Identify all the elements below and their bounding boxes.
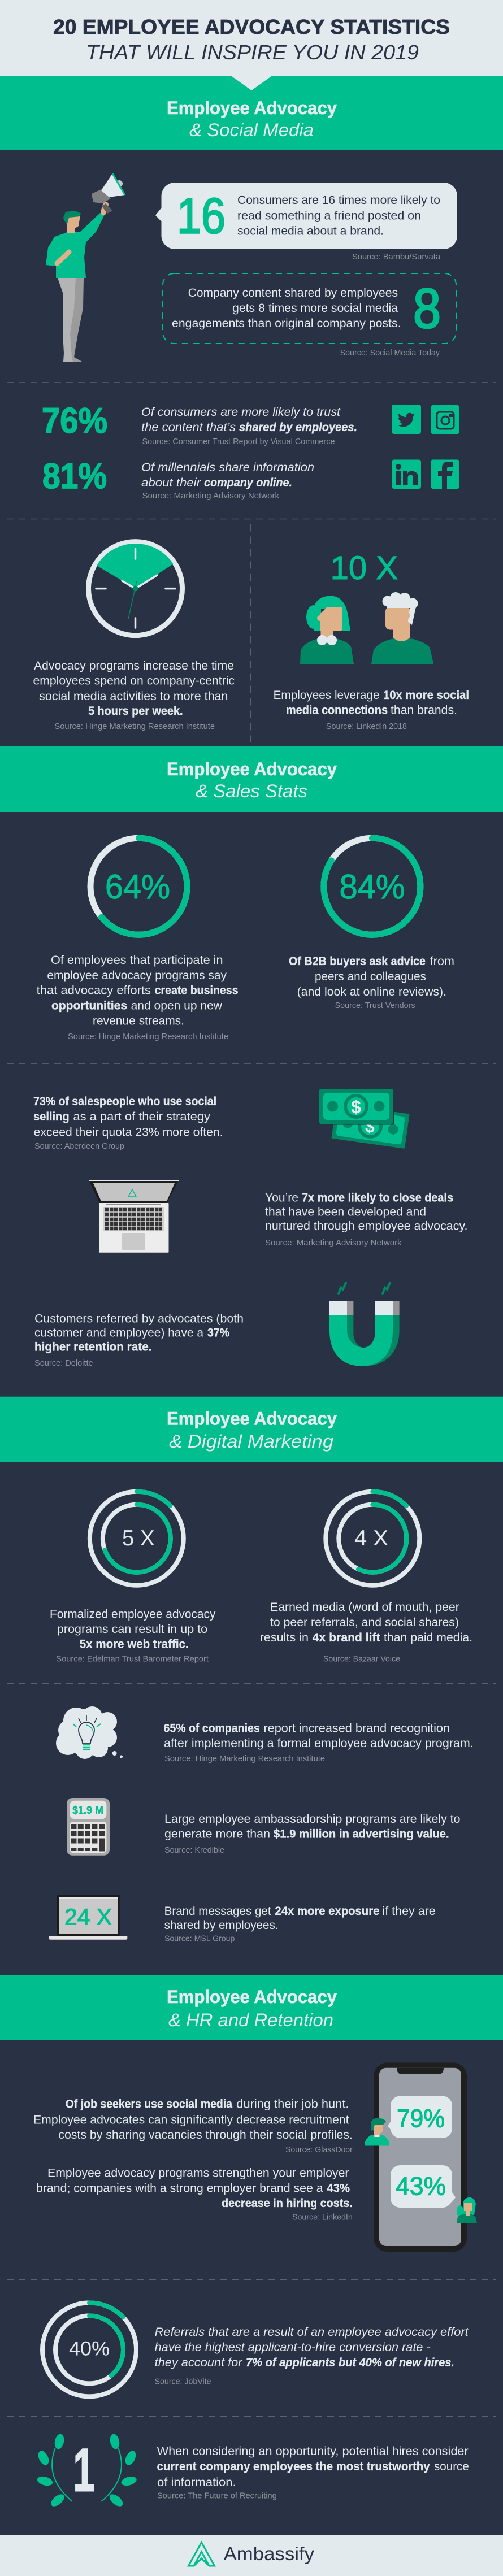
text: advocacy programs time: Advocacy programs increase the time — [34, 659, 234, 672]
icon: laptop 24 X — [49, 1895, 127, 1940]
text: B2B buyers: Source: Trust Vendors — [335, 1001, 415, 1010]
header: title panel — [0, 0, 503, 76]
text: customer retention: Source: Deloitte — [34, 1359, 93, 1368]
icon: calculator: $1.9 M — [72, 1805, 103, 1817]
text: customer retention: customer and employee) have a — [34, 1327, 203, 1340]
text: 10x connections: media connections — [286, 704, 388, 717]
illustration: person with megaphone — [46, 173, 125, 362]
stat: 81 percent: company online. — [204, 476, 292, 489]
callout: 16 times: Consumers are 16 times more likely to — [237, 194, 440, 207]
chat bubble: 43 percent — [391, 2165, 456, 2208]
text: B2B buyers: peers and colleagues — [315, 970, 426, 983]
stat: 81 percent: 81% — [42, 457, 107, 496]
text: 10x connections: Source: LinkedIn 2018 — [326, 722, 407, 731]
stat: 10 X: 10 X — [331, 550, 398, 587]
text: web traffic: 5x more web traffic. — [80, 1638, 189, 1651]
text: social selling: selling — [33, 1110, 70, 1123]
text: earned media: than paid media. — [384, 1631, 472, 1644]
double ring chart: 5 X: 5 X — [122, 1526, 155, 1550]
text: business opportunities — [37, 954, 239, 1041]
text: earned media: results in — [260, 1631, 309, 1644]
text: earned media: to peer referrals, and social shares) — [270, 1616, 459, 1629]
section banner: HR and retention: Employee Advocacy — [167, 1987, 337, 2007]
icon: magnet — [329, 1283, 400, 1366]
text: 24x exposure: 24x more exposure — [275, 1905, 379, 1918]
text: customer retention: higher retention rate. — [34, 1341, 151, 1354]
text: trustworthy source: source — [434, 2460, 469, 2473]
section banner: HR and retention: & HR and Retention — [168, 2010, 333, 2030]
callout: 16 times: social media about a brand. — [237, 225, 384, 237]
footer: Ambassify logo: Ambassify — [224, 2543, 315, 2564]
icon: Ambassify mark — [189, 2543, 215, 2566]
section banner: sales stats: & Sales Stats — [196, 781, 307, 801]
chat bubble: 43 percent: 43% — [396, 2171, 446, 2200]
icon: instagram — [431, 405, 459, 434]
icon: laptop 24 X: 24 X — [64, 1904, 112, 1930]
text: 24x exposure — [164, 1905, 436, 1944]
text: social selling: 73% of salespeople who use social — [33, 1095, 216, 1108]
double ring chart: 40 percent: 40% — [69, 2338, 110, 2360]
text: 7x close deals — [265, 1192, 468, 1248]
text: job seekers: costs by sharing vacancies through their social profiles. — [58, 2128, 353, 2141]
text: earned media: 4x brand lift — [313, 1631, 380, 1644]
stat: 76 percent: Of consumers are more likely to trust — [141, 406, 341, 419]
text: employer brand: decrease in hiring costs. — [222, 2197, 353, 2210]
text: trustworthy source — [157, 2445, 469, 2501]
text: trustworthy source: When considering an opportunity, potential hires consider — [157, 2445, 469, 2458]
section banner: sales stats — [0, 746, 503, 812]
text: referrals: Referrals that are a result of an employee advocacy effort — [155, 2326, 469, 2339]
text: advertising value: Large employee ambassadorship programs are likely to — [164, 1813, 460, 1826]
text: trustworthy source: Source: The Future of Recruiting — [157, 2492, 277, 2501]
text: business opportunities: employee advocacy programs say — [47, 969, 227, 982]
section banner: social media: Employee Advocacy — [167, 98, 337, 118]
stat: 81 percent: Of millennials share information — [141, 461, 314, 474]
text: employer brand: brand; companies with a strong employer brand see a — [36, 2182, 323, 2195]
double ring chart: 5 X — [90, 1492, 184, 1585]
chat bubble: 79 percent: 79% — [397, 2104, 445, 2133]
text: advertising value: generate more than — [164, 1828, 270, 1841]
icon: woman and man — [300, 592, 433, 664]
icon: twitter — [392, 405, 421, 434]
text: 7x close deals: Source: Marketing Advisory Network — [265, 1239, 402, 1248]
text: 7x close deals: You’re — [265, 1192, 298, 1205]
footer: Ambassify logo — [0, 2535, 503, 2576]
text: social selling: as a part of their strategy — [73, 1110, 211, 1123]
section banner: social media: & Social Media — [189, 120, 314, 140]
donut chart: 84 percent: 84% — [339, 868, 405, 906]
text: 10x connections: Employees leverage — [274, 689, 380, 702]
text: 24x exposure: shared by employees. — [164, 1919, 279, 1932]
text: customer retention — [34, 1313, 244, 1368]
text: web traffic: programs can result in up to — [57, 1623, 207, 1636]
text: advertising value: $1.9 million in advertising value. — [274, 1828, 449, 1841]
clock icon — [88, 542, 182, 636]
double ring chart: 40 percent — [42, 2303, 136, 2396]
text: referrals: they account for — [155, 2356, 243, 2369]
icon: money bills: $ — [364, 1117, 376, 1137]
text: referrals: Source: JobVite — [155, 2377, 211, 2386]
text: B2B buyers: from — [430, 955, 454, 968]
text: business opportunities: create business — [155, 984, 239, 997]
double ring chart: 4 X: 4 X — [354, 1526, 388, 1550]
donut chart: 64 percent — [90, 838, 187, 935]
avatar: woman — [457, 2197, 477, 2223]
text: earned media: Source: Bazaar Voice — [323, 1655, 400, 1664]
text: referrals: have the highest applicant-to-hire conversion rate - — [155, 2341, 431, 2354]
text: brand recognition — [164, 1722, 474, 1763]
donut chart: 64 percent: 64% — [105, 868, 170, 906]
text: advocacy programs time — [33, 659, 235, 731]
text: 7x close deals: 7x more likely to close deals — [302, 1192, 453, 1205]
text: advocacy programs time: 5 hours per week. — [88, 705, 183, 718]
text: business opportunities: and open up new — [131, 999, 223, 1013]
text: business opportunities: that advocacy efforts — [37, 984, 151, 997]
text: social selling — [33, 1095, 223, 1151]
text: 7x close deals: that have been developed and — [265, 1206, 426, 1219]
text: social selling: exceed their quota 23% more often. — [34, 1126, 223, 1139]
icon: laurel wreath number 1: 1 — [73, 2435, 94, 2504]
section banner: digital marketing: & Digital Marketing — [169, 1431, 333, 1452]
callout: 16 times: 16 — [177, 188, 226, 244]
callout: 8 times: 8 — [413, 277, 441, 340]
icon: open laptop — [89, 1180, 179, 1253]
callout: 8 times: Company content shared by employees — [188, 286, 398, 299]
callout: 8 times: engagements than original company posts. — [172, 317, 401, 330]
text: trustworthy source: current company employees the most trustworthy — [157, 2460, 430, 2473]
callout: 16 times — [155, 183, 457, 262]
text: employer brand: 43% — [327, 2182, 350, 2195]
text: job seekers: during their job hunt. — [236, 2097, 349, 2111]
stat: 76 percent: 76% — [42, 401, 107, 441]
callout: 8 times — [163, 273, 456, 358]
text: web traffic — [50, 1608, 216, 1664]
text: 24x exposure: if they are — [382, 1905, 436, 1918]
chat bubble: 79 percent — [388, 2096, 452, 2138]
text: brand recognition: report increased brand recognition — [263, 1722, 450, 1735]
stat: 81 percent — [42, 457, 314, 501]
text: employer brand: Source: LinkedIn — [292, 2213, 353, 2222]
text: B2B buyers: (and look at online reviews). — [297, 985, 446, 998]
text: 24x exposure: Source: MSL Group — [164, 1935, 235, 1944]
text: business opportunities: Of employees that participate in — [51, 954, 223, 967]
callout: 16 times: Source: Bambu/Survata — [352, 253, 441, 262]
icon: money bills — [319, 1089, 410, 1149]
donut chart: 84 percent — [324, 838, 420, 935]
text: employer brand — [36, 2167, 353, 2222]
text: referrals: 7% of applicants but 40% of new hires. — [246, 2356, 454, 2369]
title line 1: 20 EMPLOYEE ADVOCACY STATISTICS — [53, 15, 450, 38]
text: brand recognition: 65% of companies — [164, 1722, 260, 1735]
stat: 76 percent: shared by employees. — [239, 421, 357, 434]
text: B2B buyers: Of B2B buyers ask advice — [289, 955, 426, 968]
section banner: sales stats: Employee Advocacy — [167, 759, 337, 779]
section banner: HR and retention — [0, 1975, 503, 2040]
text: earned media — [260, 1601, 472, 1664]
text: advertising value: Source: Kredible — [164, 1846, 224, 1855]
text: 10x connections — [274, 689, 469, 731]
text: earned media: Earned media (word of mouth, peer — [270, 1601, 459, 1614]
text: 7x close deals: nurtured through employee advocacy. — [265, 1220, 468, 1233]
text: 10x connections: than brands. — [391, 704, 457, 717]
text: job seekers: Of job seekers use social media — [66, 2097, 232, 2111]
text: customer retention: Customers referred by advocates (both — [34, 1313, 244, 1326]
title line 2: THAT WILL INSPIRE YOU IN 2019 — [86, 41, 419, 64]
text: advertising value — [164, 1813, 460, 1855]
text: job seekers: Employee advocates can significantly decrease recruitment — [33, 2113, 349, 2127]
icon: calculator — [67, 1798, 110, 1856]
text: 10x connections: 10x more social — [383, 689, 469, 702]
text: brand recognition: after implementing a formal employee advocacy program. — [164, 1737, 474, 1750]
icon: linkedin — [392, 460, 421, 489]
avatar: man — [365, 2118, 389, 2146]
text: brand recognition: Source: Hinge Marketing Research Institute — [164, 1754, 325, 1763]
text: web traffic: Formalized employee advocacy — [50, 1608, 216, 1621]
stat: 76 percent — [42, 401, 357, 446]
text: B2B buyers — [289, 955, 454, 1010]
text: customer retention: 37% — [207, 1327, 229, 1340]
text: business opportunities: revenue streams. — [93, 1015, 184, 1027]
text: advocacy programs time: Source: Hinge Marketing Research Institute — [54, 722, 215, 731]
callout: 16 times: read something a friend posted on — [237, 209, 421, 223]
text: business opportunities: Source: Hinge Marketing Research Institute — [68, 1032, 228, 1041]
phone illustration with chat bubbles — [365, 2062, 477, 2252]
stat: 76 percent: Source: Consumer Trust Report by Visual Commerce — [142, 437, 335, 446]
icon: lightbulb thought cloud — [56, 1706, 123, 1759]
text: referrals — [155, 2326, 469, 2386]
section banner: digital marketing: Employee Advocacy — [167, 1409, 337, 1429]
text: trustworthy source: of information. — [157, 2476, 236, 2489]
double ring chart: 4 X — [326, 1492, 419, 1585]
text: 24x exposure: Brand messages get — [164, 1905, 271, 1918]
text: web traffic: Source: Edelman Trust Barometer Report — [56, 1655, 209, 1664]
text: social selling: Source: Aberdeen Group — [34, 1142, 124, 1151]
callout: 8 times: gets 8 times more social media — [232, 302, 398, 315]
stat: 81 percent: Source: Marketing Advisory Network — [142, 492, 280, 501]
section banner: digital marketing — [0, 1397, 503, 1462]
icon: laurel wreath number 1 — [36, 2433, 138, 2509]
stat: 76 percent: the content that’s — [141, 421, 236, 434]
stat: 81 percent: about their — [141, 476, 201, 489]
text: job seekers — [33, 2097, 353, 2154]
text: job seekers: Source: GlassDoor — [285, 2145, 353, 2154]
icon: money bills: $ — [351, 1097, 361, 1117]
icon: facebook — [431, 460, 459, 489]
text: advocacy programs time: employees spend on company-centric — [33, 675, 235, 688]
text: employer brand: Employee advocacy programs strengthen your employer — [47, 2167, 349, 2180]
text: advocacy programs time: social media activities to more than — [39, 690, 228, 703]
callout: 8 times: Source: Social Media Today — [340, 349, 440, 358]
text: business opportunities: opportunities — [51, 999, 127, 1013]
section banner: social media — [0, 76, 503, 150]
